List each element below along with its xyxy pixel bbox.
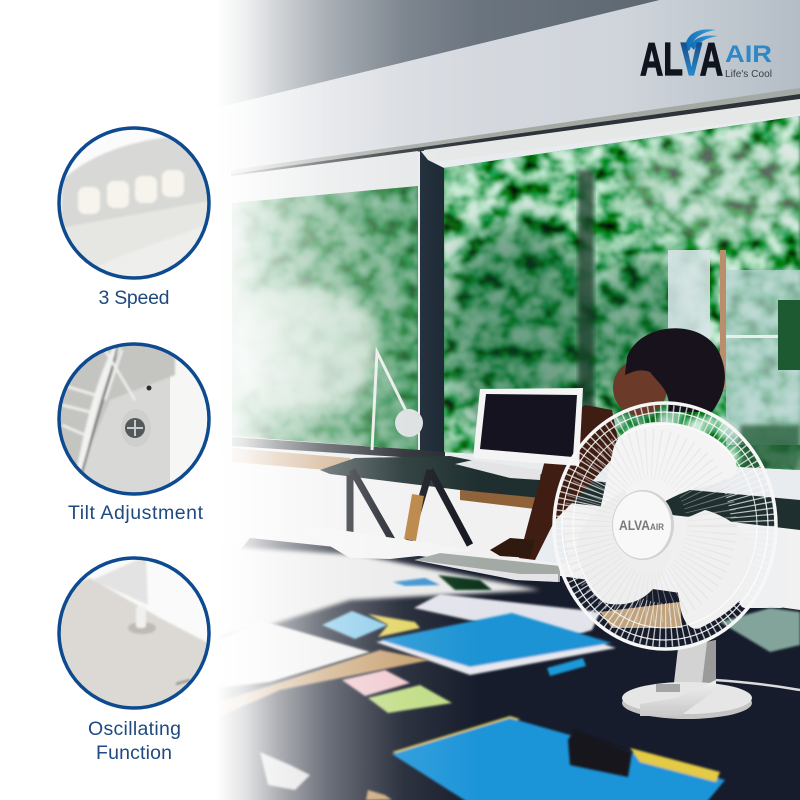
fan outer rim <box>554 403 776 649</box>
left window foliage <box>230 186 418 456</box>
cyan sticky notes <box>322 611 388 639</box>
man <box>490 328 725 565</box>
curtain rail <box>231 88 800 175</box>
arm and hand <box>519 405 620 560</box>
crumpled paper under table <box>260 752 310 790</box>
yellow sticky notes <box>368 614 420 637</box>
ceiling beam <box>200 0 800 175</box>
cyan paper tag <box>393 578 440 586</box>
wall below window <box>200 455 800 620</box>
fan blade left <box>577 490 672 604</box>
feature: Oscillating Function: Oscillating <box>88 718 181 740</box>
window frame <box>420 150 444 456</box>
logo swoosh <box>685 29 718 52</box>
fan blade top <box>600 422 737 515</box>
sawhorse legs <box>350 470 470 545</box>
fan rear see-through grille <box>577 427 753 625</box>
printed sheet <box>414 594 600 640</box>
closed laptop <box>414 553 560 582</box>
white fade overlay <box>0 0 480 800</box>
brand logo: AIR <box>725 41 772 68</box>
wood seen through fan <box>600 602 682 628</box>
fan hub logo: ALVA <box>619 517 650 533</box>
left roller blind <box>231 151 418 203</box>
table fan product: AIR <box>650 522 664 532</box>
photo: oscillating knob <box>58 556 210 709</box>
head <box>613 360 667 416</box>
green sheet right <box>720 608 800 652</box>
green sticky note <box>368 685 452 713</box>
blue folder <box>392 716 725 800</box>
fan base <box>622 680 752 719</box>
blue notebook <box>376 613 616 675</box>
blue marker <box>547 658 586 676</box>
office photo background <box>200 0 800 800</box>
fan blade right <box>660 510 755 629</box>
fan neck <box>672 640 716 708</box>
fan hub <box>612 490 674 560</box>
brand logo <box>640 29 772 85</box>
power cord <box>715 680 800 690</box>
wooden desk rim <box>232 448 350 472</box>
table fan product <box>554 403 800 719</box>
right roller blind <box>424 99 800 163</box>
photo: speed buttons <box>61 136 208 276</box>
open laptop <box>455 388 583 480</box>
brand logo: Life's Cool <box>725 68 772 80</box>
feature: Oscillating Function: Function <box>96 742 172 764</box>
paper sheets on table <box>200 545 540 640</box>
feature: 3 Speed <box>58 127 215 309</box>
shirt <box>535 510 570 565</box>
phone on table <box>438 575 492 590</box>
right window foliage <box>440 110 800 480</box>
white pot <box>740 530 786 608</box>
photo: tilt screw <box>58 343 210 495</box>
wood table strip <box>200 650 430 725</box>
black phone <box>568 730 632 777</box>
white papers <box>200 620 370 690</box>
back desk top <box>320 456 800 530</box>
fan front grille spokes <box>562 412 768 640</box>
wood leg under table <box>366 790 392 800</box>
ceiling <box>200 0 660 112</box>
feature: 3 Speed: 3 Speed <box>98 287 170 309</box>
feature: Oscillating Function <box>58 556 210 764</box>
rolled paper <box>303 527 474 559</box>
window sill <box>232 437 445 460</box>
desk lamp <box>350 352 423 462</box>
main dark table <box>200 538 800 800</box>
feature: Tilt Adjustment <box>58 343 210 524</box>
feature: Tilt Adjustment: Tilt Adjustment <box>68 502 204 524</box>
pink sticky note <box>342 670 410 696</box>
brand logo: ALVA <box>640 33 723 85</box>
